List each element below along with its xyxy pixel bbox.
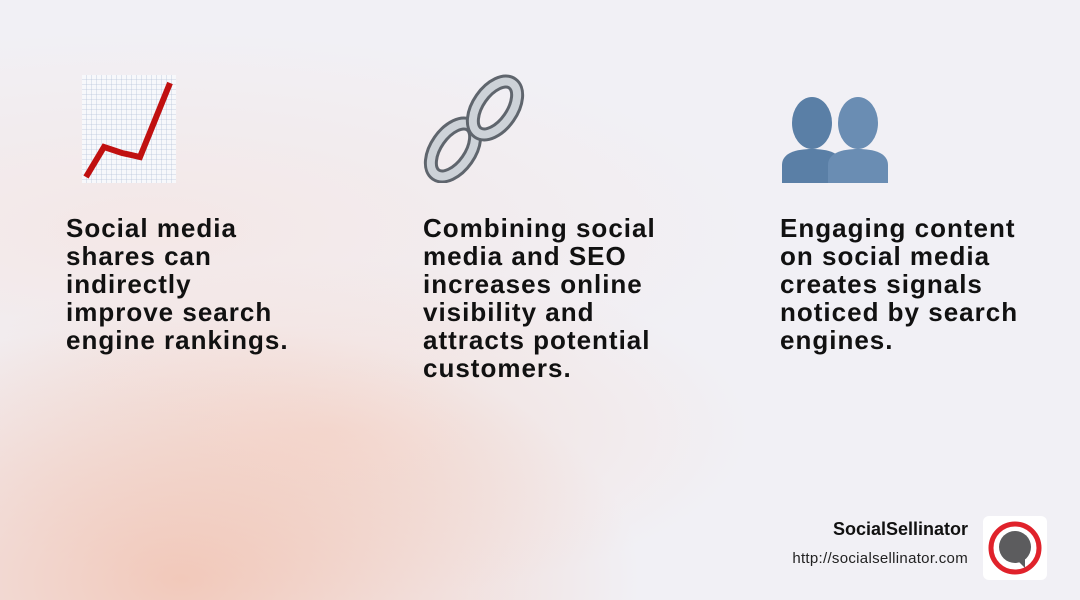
brand url: http://socialsellinator.com — [792, 550, 968, 567]
text: column 1: improve search — [66, 297, 272, 327]
icon: people — [782, 97, 888, 183]
icon: chart — [82, 75, 176, 183]
icon: link — [424, 74, 524, 183]
text: column 2: media and SEO — [423, 241, 627, 271]
text: column 2: Combining social — [423, 213, 656, 243]
brand name: SocialSellinator — [833, 519, 968, 539]
text: column 2 — [423, 213, 656, 383]
text: column 3: engines. — [780, 325, 893, 355]
text: column 2: visibility and — [423, 297, 594, 327]
text: column 1 — [66, 213, 289, 355]
text: column 3: noticed by search — [780, 297, 1018, 327]
text: column 1: Social media — [66, 213, 237, 243]
logo — [983, 516, 1047, 580]
text: column 3: Engaging content — [780, 213, 1016, 243]
text: column 1: engine rankings. — [66, 325, 289, 355]
text: column 2: attracts potential — [423, 325, 650, 355]
text: column 3 — [780, 213, 1018, 355]
text: column 1: shares can — [66, 241, 212, 271]
text: column 3: on social media — [780, 241, 990, 271]
text: column 1: indirectly — [66, 269, 192, 299]
text: column 3: creates signals — [780, 269, 983, 299]
text: column 2: increases online — [423, 269, 643, 299]
text: column 2: customers. — [423, 353, 572, 383]
